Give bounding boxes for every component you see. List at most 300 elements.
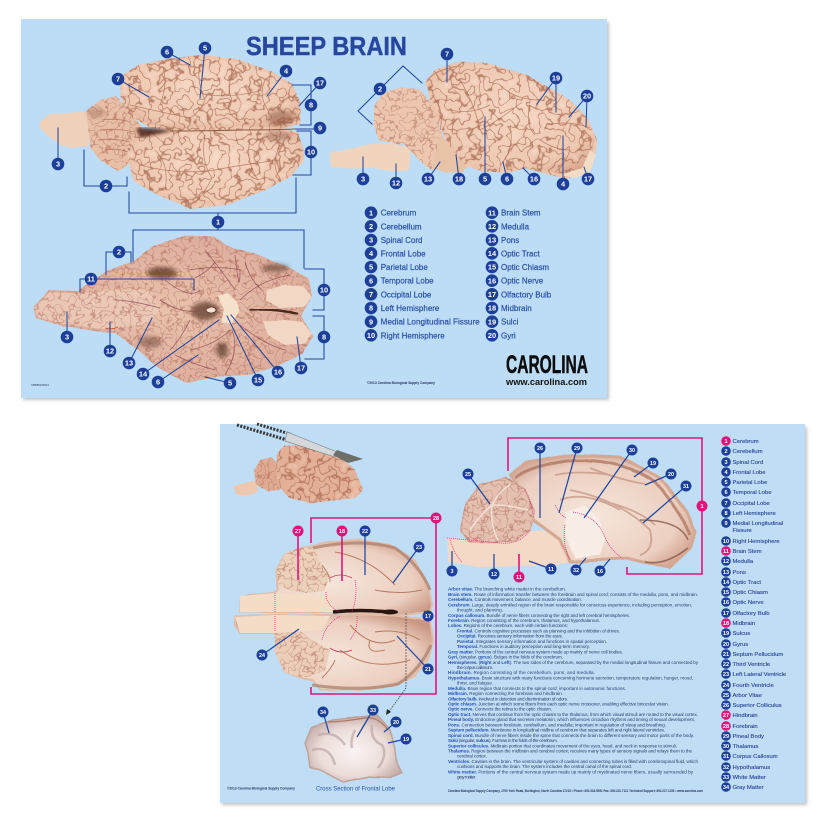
bracket: right hemisphere, dorsal bbox=[293, 131, 317, 175]
key 7 bbox=[721, 498, 771, 508]
key 19: Sulcus bbox=[732, 631, 750, 637]
text block: glossary: thought, and planning. bbox=[457, 608, 503, 613]
key 32 bbox=[721, 762, 770, 772]
bracket: right hemisphere, ventral: 10 bbox=[320, 286, 328, 295]
key 34: 34 bbox=[723, 785, 730, 791]
bracket: cerebrum, joining dorsal and ventral views bbox=[129, 178, 304, 268]
bracket: cerebrum, sagittal bbox=[508, 438, 708, 574]
callout: hypothalamus bbox=[570, 558, 586, 576]
arrow: cut line to cross section bbox=[386, 613, 406, 715]
caption: cross section: Cross Section of Frontal Lobe bbox=[316, 786, 395, 792]
key 4 bbox=[721, 467, 766, 477]
legend item 19 bbox=[486, 315, 519, 328]
title: SHEEP BRAIN bbox=[246, 31, 407, 61]
callout: white matter: 33 bbox=[370, 708, 376, 714]
key 7: 7 bbox=[724, 501, 728, 507]
key 30: 30 bbox=[723, 744, 729, 750]
logo: Carolina wordmark and URL: CAROLINA bbox=[506, 351, 588, 379]
callout: frontal lobe, lateral: 4 bbox=[561, 180, 566, 189]
key 28: 28 bbox=[723, 724, 729, 730]
key 14: Optic Tract bbox=[732, 580, 761, 586]
text block: glossary: Cerebrum. Large, deeply wrinkled region of the brain responsible for conscious experience, including perception, emotion, bbox=[448, 602, 692, 607]
bracket: left hemisphere, ventral bbox=[305, 316, 330, 359]
callout: third ventricle bbox=[360, 526, 370, 575]
key 22: 22 bbox=[723, 662, 729, 668]
text block: glossary: Spinal cord. Bundle of nerve fibers inside the spine that connects the brain to different sensory and motor parts of the body. bbox=[448, 733, 694, 738]
callout: temporal lobe, ventral: 6 bbox=[156, 378, 160, 387]
legend item 3: Spinal Cord bbox=[381, 236, 423, 245]
key 26: 26 bbox=[723, 703, 729, 709]
key 30 bbox=[721, 741, 758, 751]
legend item 17: 17 bbox=[488, 290, 496, 299]
logo: Carolina wordmark and URL: www.carolina.com bbox=[505, 377, 587, 388]
legend item 4: Frontal Lobe bbox=[381, 249, 426, 258]
bracket: forebrain: 28 bbox=[433, 516, 439, 522]
legend item 4 bbox=[365, 247, 426, 260]
key 8 bbox=[721, 508, 776, 518]
legend item 1: Cerebrum bbox=[381, 209, 417, 218]
callout: spinal cord, lateral bbox=[357, 157, 369, 185]
text block: glossary bbox=[448, 587, 699, 780]
callout: optic tract, ventral bbox=[137, 320, 219, 380]
key 23 bbox=[721, 669, 787, 679]
text block: glossary: Brain stem. Route of information transfer between the forebrain and spinal cord; consists of the medulla, pons, and midbrain. bbox=[448, 592, 698, 597]
legend item 7 bbox=[365, 288, 432, 301]
callout: pons, lateral bbox=[422, 162, 440, 185]
legend item 19: Sulci bbox=[501, 318, 519, 327]
callout: optic nerve, lateral: 16 bbox=[530, 175, 538, 184]
photo: ventral view of brain bbox=[35, 237, 312, 382]
key 30: Thalamus bbox=[732, 744, 758, 750]
legend item 16 bbox=[486, 274, 544, 287]
legend item 9: 9 bbox=[369, 317, 373, 326]
callout: white matter bbox=[357, 704, 378, 737]
key 9: Fissure bbox=[732, 528, 753, 534]
callout: septum pellucidum bbox=[397, 636, 434, 674]
illustration: scalpel cutting whole brain bbox=[233, 424, 363, 502]
key 17 bbox=[721, 608, 770, 618]
text block: glossary: Frontal. Controls cognitive processes such as planning and the inhibition of drives. bbox=[457, 628, 620, 634]
key 21: Septum Pellucidum bbox=[732, 652, 783, 658]
key 17: Olfactory Bulb bbox=[732, 611, 770, 617]
photo: horizontal section of brain bbox=[235, 540, 433, 690]
card shadow: top poster bbox=[23, 22, 609, 400]
callout: superior colliculus bbox=[534, 442, 546, 518]
callout: sulcus, sagittal: 19 bbox=[650, 461, 656, 467]
text block: glossary: Hindbrain. Region consisting of the cerebellum, pons, and medulla. bbox=[448, 670, 595, 675]
callout: thalamus: 30 bbox=[629, 448, 635, 454]
key 13 bbox=[721, 567, 746, 577]
key 20 bbox=[721, 639, 748, 649]
panel: dissection poster bbox=[220, 424, 805, 803]
legend item 20: 20 bbox=[488, 331, 496, 340]
text block: glossary: Medulla. Brain region that connects to the spinal cord; important in autonomic functions. bbox=[448, 686, 626, 691]
callout: brain stem, pink: 11 bbox=[516, 575, 522, 581]
key 2: Cerebellum bbox=[732, 449, 763, 455]
text block: glossary: Hemispheres. (Right and Left). The two sides of the cerebrum, separated by the medial longitudinal fissure and connected by bbox=[448, 660, 699, 665]
bracket: cerebellum, lateral: 2 bbox=[378, 85, 382, 94]
key 12 bbox=[721, 556, 754, 566]
callout: spinal cord, dorsal bbox=[52, 128, 64, 170]
legend item 10: Right Hemisphere bbox=[381, 331, 445, 340]
legend item 9 bbox=[365, 315, 480, 328]
key 27: 27 bbox=[723, 713, 729, 719]
legend item 13: Pons bbox=[501, 236, 519, 245]
callout: superior colliculus: 26 bbox=[537, 446, 543, 452]
key 10: Right Hemisphere bbox=[732, 539, 780, 545]
callout: septum pellucidum: 21 bbox=[425, 667, 431, 673]
callout: pons, ventral: 13 bbox=[125, 359, 133, 368]
legend item 12: Medulla bbox=[501, 222, 530, 231]
key 24: Fourth Ventricle bbox=[732, 683, 774, 689]
legend item 18: Midbrain bbox=[501, 304, 532, 313]
legend item 7: Occipital Lobe bbox=[381, 290, 432, 299]
callout: brain stem, pink bbox=[514, 554, 524, 582]
bracket: right hemisphere, ventral bbox=[305, 269, 330, 310]
key 16: Optic Nerve bbox=[732, 600, 764, 606]
key 25: 25 bbox=[723, 693, 729, 699]
callout: thalamus bbox=[584, 444, 638, 518]
key 9: Medial Longitudinal bbox=[732, 521, 783, 527]
legend item 15 bbox=[486, 261, 549, 273]
callout: medulla, lateral bbox=[390, 164, 402, 189]
legend item 6: Temporal Lobe bbox=[381, 277, 434, 286]
photo: lateral view of brain bbox=[330, 63, 596, 178]
text block: glossary: Arbor vitae. The branching white matter in the cerebellum. bbox=[448, 587, 566, 592]
text block: glossary: Lobes. Regions of the cerebrum, each with certain functions: bbox=[448, 623, 568, 628]
key 21: 21 bbox=[723, 652, 729, 658]
callout: optic nerve, sagittal bbox=[594, 559, 610, 576]
callout: frontal lobe, dorsal: 4 bbox=[284, 67, 289, 76]
key 11 bbox=[721, 546, 762, 556]
key 24 bbox=[721, 680, 774, 690]
key 27 bbox=[721, 710, 758, 720]
legend item 11 bbox=[486, 206, 541, 219]
text block: glossary: Sulci (singular, sulcus). Furrows in the folds of the cerebrum. bbox=[448, 738, 558, 743]
key 33: White Matter bbox=[732, 775, 766, 781]
text block: glossary: cerebral cortex. bbox=[457, 754, 487, 759]
bracket: brain stem, ventral bbox=[80, 273, 194, 292]
text block: glossary: Gray matter. Portions of the central nervous system made up mainly of nerve cell bodies. bbox=[448, 649, 623, 654]
bracket: left hemisphere, dorsal: 8 bbox=[309, 101, 313, 110]
key 34 bbox=[721, 782, 764, 792]
legend item 5: 5 bbox=[369, 263, 373, 272]
key 6: 6 bbox=[724, 490, 728, 496]
bracket: cerebellum, lateral bbox=[358, 66, 422, 124]
callout: corpus callosum: 31 bbox=[683, 484, 689, 490]
key 1 bbox=[721, 436, 759, 446]
legend item 3: 3 bbox=[369, 236, 373, 245]
callout: olfactory bulb, ventral: 17 bbox=[297, 364, 305, 373]
key 21 bbox=[721, 649, 783, 659]
text block: glossary: Gyri, (singular, gyrus). Bulges in the folds of the cerebrum. bbox=[448, 654, 563, 660]
callout: spinal cord, sagittal bbox=[446, 551, 458, 576]
legend item 12 bbox=[486, 220, 530, 233]
callout: fourth ventricle: 24 bbox=[259, 653, 265, 659]
callout: occipital lobe, lateral bbox=[441, 48, 453, 82]
callout: corpus callosum bbox=[643, 480, 692, 523]
key 24: 24 bbox=[723, 683, 730, 689]
callout: gyri, lateral bbox=[569, 90, 593, 127]
copyright note, bottom poster: ©2013 Carolina Biological Supply Company bbox=[227, 786, 295, 790]
callout: medulla, sagittal bbox=[488, 554, 500, 580]
key 10 bbox=[721, 536, 780, 546]
key 31: Corpus Callosum bbox=[732, 754, 778, 760]
key 8: 8 bbox=[724, 511, 728, 517]
key 28: Forebrain bbox=[732, 724, 758, 730]
key 29: 29 bbox=[723, 734, 729, 740]
text block: glossary: Optic chiasm. Junction at which some fibers from each optic nerve crossover, enabling effective binocular vision. bbox=[448, 702, 669, 706]
callout: medulla, ventral: 12 bbox=[106, 347, 114, 356]
callout: spinal cord, dorsal: 3 bbox=[56, 160, 60, 169]
text block: glossary: Pons. Connection between forebrain, cerebellum, and medulla; important in regulation of sleep and breathing. bbox=[448, 722, 666, 727]
key 27: Hindbrain bbox=[732, 713, 758, 719]
legend item 13 bbox=[486, 234, 519, 246]
legend item 6: 6 bbox=[369, 276, 373, 285]
key 14 bbox=[721, 577, 761, 587]
callout: gray matter: 34 bbox=[320, 710, 326, 716]
callout: pineal body: 29 bbox=[574, 446, 580, 452]
callout: midbrain: 18 bbox=[339, 529, 345, 535]
legend item 11: 11 bbox=[488, 208, 496, 217]
legend item 16: Optic Nerve bbox=[501, 277, 544, 286]
bracket: cerebellum, ventral: 2 bbox=[117, 248, 121, 257]
text block: glossary: Midbrain. Region connecting the forebrain and hindbrain. bbox=[448, 691, 563, 696]
callout: sulcus, sagittal bbox=[634, 458, 658, 477]
key 2 bbox=[721, 446, 763, 456]
legend item 20: Gyri bbox=[501, 331, 516, 340]
legend item 14: Optic Tract bbox=[501, 249, 540, 258]
callout: parietal lobe, ventral bbox=[205, 377, 236, 389]
key 11: 11 bbox=[723, 549, 729, 555]
callout: sulci, lateral bbox=[537, 72, 562, 112]
key 23: 23 bbox=[723, 672, 729, 678]
callout: temporal lobe, ventral bbox=[152, 355, 198, 388]
callout: sulci, lateral: 19 bbox=[552, 74, 560, 83]
key 16 bbox=[721, 597, 764, 607]
callout: hindbrain bbox=[292, 526, 304, 580]
text block: glossary: Cerebellum. Controls movement, balance, and muscle coordination. bbox=[448, 597, 582, 602]
callout: hindbrain: 27 bbox=[295, 529, 301, 535]
key 28 bbox=[721, 721, 758, 731]
callout: sulcus, cross section bbox=[388, 734, 412, 744]
text block: glossary: Olfactory bulb. Involved in detection and discrimination of odors. bbox=[448, 696, 568, 701]
key 29 bbox=[721, 731, 764, 741]
legend item 18 bbox=[486, 302, 532, 314]
key 9: 9 bbox=[724, 521, 728, 527]
key 1: 1 bbox=[724, 439, 728, 445]
key 14: 14 bbox=[723, 580, 730, 586]
key 20: 20 bbox=[723, 642, 729, 648]
key 32: 32 bbox=[723, 765, 729, 771]
text block: glossary: White matter. Portions of the central nervous system made up mainly of myelinated nerve fibers, usually surrounded by bbox=[448, 769, 694, 774]
key 31 bbox=[721, 751, 778, 761]
callout: pons, ventral bbox=[123, 318, 152, 369]
legend item 5: Parietal Lobe bbox=[381, 263, 428, 272]
key 4: 4 bbox=[724, 470, 728, 476]
legend item 2 bbox=[365, 220, 422, 233]
legend item 7: 7 bbox=[369, 290, 373, 299]
callout: optic tract, ventral: 14 bbox=[139, 370, 148, 379]
legend item 18: 18 bbox=[488, 304, 496, 313]
key 2: 2 bbox=[724, 449, 728, 455]
card shadow: bottom poster bbox=[222, 427, 807, 805]
text block: glossary: Optic tract. Nerves that continue from the optic chiasm to the thalamus, from which visual stimuli are routed to the visual cortex. bbox=[448, 712, 698, 717]
legend item 8: Left Hemisphere bbox=[381, 304, 440, 313]
callout: optic chiasm, ventral bbox=[227, 316, 264, 386]
key 5: 5 bbox=[724, 480, 728, 486]
bracket: left hemisphere, dorsal bbox=[292, 85, 317, 125]
callout: pons, lateral: 13 bbox=[424, 175, 432, 184]
key 33 bbox=[721, 772, 766, 782]
key 10: 10 bbox=[723, 539, 729, 545]
bracket: cerebellum, dorsal bbox=[84, 150, 127, 192]
bracket: cerebellum, ventral bbox=[106, 246, 131, 275]
callout: olfactory bulb, section bbox=[422, 610, 434, 622]
key 18: 18 bbox=[723, 621, 729, 627]
key 18: Midbrain bbox=[732, 621, 755, 627]
legend item 15: Optic Chiasm bbox=[501, 263, 549, 272]
key 3: Spinal Cord bbox=[732, 460, 763, 466]
copyright note, top poster: ©2013 Carolina Biological Supply Company bbox=[367, 381, 435, 385]
callout: optic nerve, ventral: 16 bbox=[274, 368, 282, 377]
callout: temporal lobe, dorsal bbox=[161, 46, 190, 65]
legend item 20 bbox=[486, 329, 516, 342]
callout: parietal lobe, lateral bbox=[479, 117, 491, 185]
callout: parietal lobe, dorsal bbox=[199, 42, 211, 98]
callout: medulla, sagittal: 12 bbox=[491, 572, 497, 578]
key 11: Brain Stem bbox=[732, 549, 762, 555]
photo: dorsal view of brain bbox=[40, 56, 303, 207]
callout: occipital lobe, dorsal bbox=[112, 73, 149, 97]
text block: glossary: Corpus callosum. Bundle of nerve fibers connecting the right and left cerebral hemispheres. bbox=[448, 613, 630, 618]
product code: CB685W3001 bbox=[31, 383, 49, 387]
text block: glossary: cushions and supports the brain. The system includes the central canal of the spinal cord. bbox=[457, 764, 632, 769]
callout: gyrus, cross section bbox=[384, 716, 402, 732]
callout: pons, sagittal: 11 bbox=[548, 567, 554, 573]
key 18 bbox=[721, 618, 755, 628]
callout: frontal lobe, dorsal bbox=[267, 65, 292, 96]
callout: gyrus, sagittal bbox=[645, 468, 676, 485]
callout: pons, sagittal bbox=[529, 561, 556, 574]
text block: glossary: Superior colliculus. Midbrain portion that coordinates movement of the eyes, head, and neck in response to stimuli. bbox=[448, 743, 677, 748]
callout: gyri, lateral: 20 bbox=[583, 92, 591, 101]
key 6: Temporal Lobe bbox=[732, 490, 772, 496]
bracket: forebrain bbox=[311, 512, 442, 694]
key 12: 12 bbox=[723, 559, 729, 565]
callout: gyrus, cross section: 20 bbox=[393, 720, 399, 726]
callout: pineal body bbox=[559, 442, 582, 513]
key 19 bbox=[721, 628, 750, 638]
legend item 1 bbox=[365, 206, 417, 219]
legend item 10: 10 bbox=[367, 331, 375, 340]
key 23: Left Lateral Ventricle bbox=[732, 672, 787, 678]
callout: frontal lobe, lateral bbox=[557, 136, 569, 190]
callout: olfactory bulb, lateral: 17 bbox=[584, 175, 592, 184]
callout: gray matter bbox=[318, 706, 329, 733]
key 33: 33 bbox=[723, 775, 729, 781]
callout: medial longitudinal fissure bbox=[296, 122, 326, 134]
key 3 bbox=[721, 457, 763, 467]
key 26 bbox=[721, 700, 782, 710]
legend item 10 bbox=[365, 329, 445, 342]
legend item 15: 15 bbox=[488, 263, 496, 272]
callout: midbrain, lateral bbox=[453, 155, 465, 185]
legend item 14 bbox=[486, 247, 540, 260]
key 5 bbox=[721, 477, 768, 487]
key 31: 31 bbox=[723, 754, 729, 760]
callout: olfactory bulb, dorsal bbox=[299, 77, 326, 106]
legend item 3 bbox=[365, 234, 423, 246]
callout: hypothalamus: 32 bbox=[573, 568, 579, 574]
text block: glossary: Thalamus. Region between the midbrain and cerebral cortex; receives many types of sensory signals and relays them to the bbox=[448, 748, 692, 754]
legend: structures 1 to 10 bbox=[365, 206, 480, 342]
key 34: Gray Matter bbox=[732, 785, 764, 791]
legend item 8: 8 bbox=[369, 304, 373, 313]
legend item 13: 13 bbox=[488, 236, 496, 245]
callout: sulcus, cross section: 19 bbox=[403, 737, 409, 743]
key 6 bbox=[721, 487, 772, 497]
callout: medial longitudinal fissure: 9 bbox=[318, 124, 322, 133]
logo: Carolina wordmark and URL bbox=[505, 351, 588, 388]
key 5: Parietal Lobe bbox=[732, 480, 768, 486]
key 25 bbox=[721, 690, 763, 700]
text block: glossary: thirst, and fatigue. bbox=[457, 681, 493, 686]
legend item 12: 12 bbox=[488, 222, 496, 231]
text block: glossary: Pineal body. Endocrine gland that secretes melatonin, which influences circadian rhythms and timing of sexual development. bbox=[448, 717, 695, 722]
key 17: 17 bbox=[723, 611, 729, 617]
text block: glossary: Septum pellucidum. Membrane in longitudinal midline of cerebrum that separates left and right lateral ventricles. bbox=[448, 728, 665, 733]
callout: midbrain, lateral: 18 bbox=[455, 175, 463, 184]
text block: glossary: Forebrain. Region consisting of the cerebrum, thalamus, and hypothalamus. bbox=[448, 618, 600, 623]
key 32: Hypothalamus bbox=[732, 765, 770, 771]
key 29: Pineal Body bbox=[732, 734, 764, 740]
key 25: Arbor Vitae bbox=[732, 693, 763, 699]
callout: medulla, ventral bbox=[104, 322, 116, 357]
legend: structures 11 to 20 bbox=[486, 206, 552, 342]
legend item 11: Brain Stem bbox=[501, 209, 541, 218]
callout: olfactory bulb, dorsal: 17 bbox=[316, 79, 324, 88]
key 12: Medulla bbox=[732, 559, 754, 565]
callout: temporal lobe, lateral: 6 bbox=[505, 175, 509, 184]
legend item 2: 2 bbox=[369, 222, 373, 231]
text block: glossary: Occipital. Receives sensory information from the eyes. bbox=[457, 634, 563, 639]
bracket: brain stem, ventral: 11 bbox=[87, 275, 95, 284]
panel: external anatomy poster bbox=[21, 19, 607, 398]
callout: spinal cord, ventral: 3 bbox=[65, 333, 69, 342]
text block: glossary: Optic nerve. Connects the retina to the optic chiasm. bbox=[448, 707, 552, 712]
text block: glossary: Ventricles. Cavities in the brain. The ventricular system of cavities and connecting tubes is filled with cerebrospinal fluid, which bbox=[448, 759, 698, 764]
key 19: 19 bbox=[723, 631, 729, 637]
legend item 14: 14 bbox=[488, 249, 497, 258]
key 3: 3 bbox=[724, 460, 728, 466]
key 26: Superior Colliculus bbox=[732, 703, 782, 709]
legend item 5 bbox=[365, 261, 428, 273]
key 15: Optic Chiasm bbox=[732, 590, 768, 596]
callout: arbor vitae: 25 bbox=[465, 472, 471, 478]
legend item 17 bbox=[486, 288, 552, 301]
bracket: left hemisphere, ventral: 8 bbox=[322, 333, 326, 342]
callout: parietal lobe, ventral: 5 bbox=[228, 379, 232, 388]
callout: optic nerve, sagittal: 16 bbox=[597, 569, 603, 575]
key 22: Third Ventricle bbox=[732, 662, 771, 668]
key 15 bbox=[721, 587, 768, 597]
key 22 bbox=[721, 659, 771, 669]
legend item 16: 16 bbox=[488, 276, 496, 285]
legend item 8 bbox=[365, 302, 440, 314]
callout: spinal cord, lateral: 3 bbox=[361, 175, 365, 184]
callout: parietal lobe, lateral: 5 bbox=[483, 175, 487, 184]
